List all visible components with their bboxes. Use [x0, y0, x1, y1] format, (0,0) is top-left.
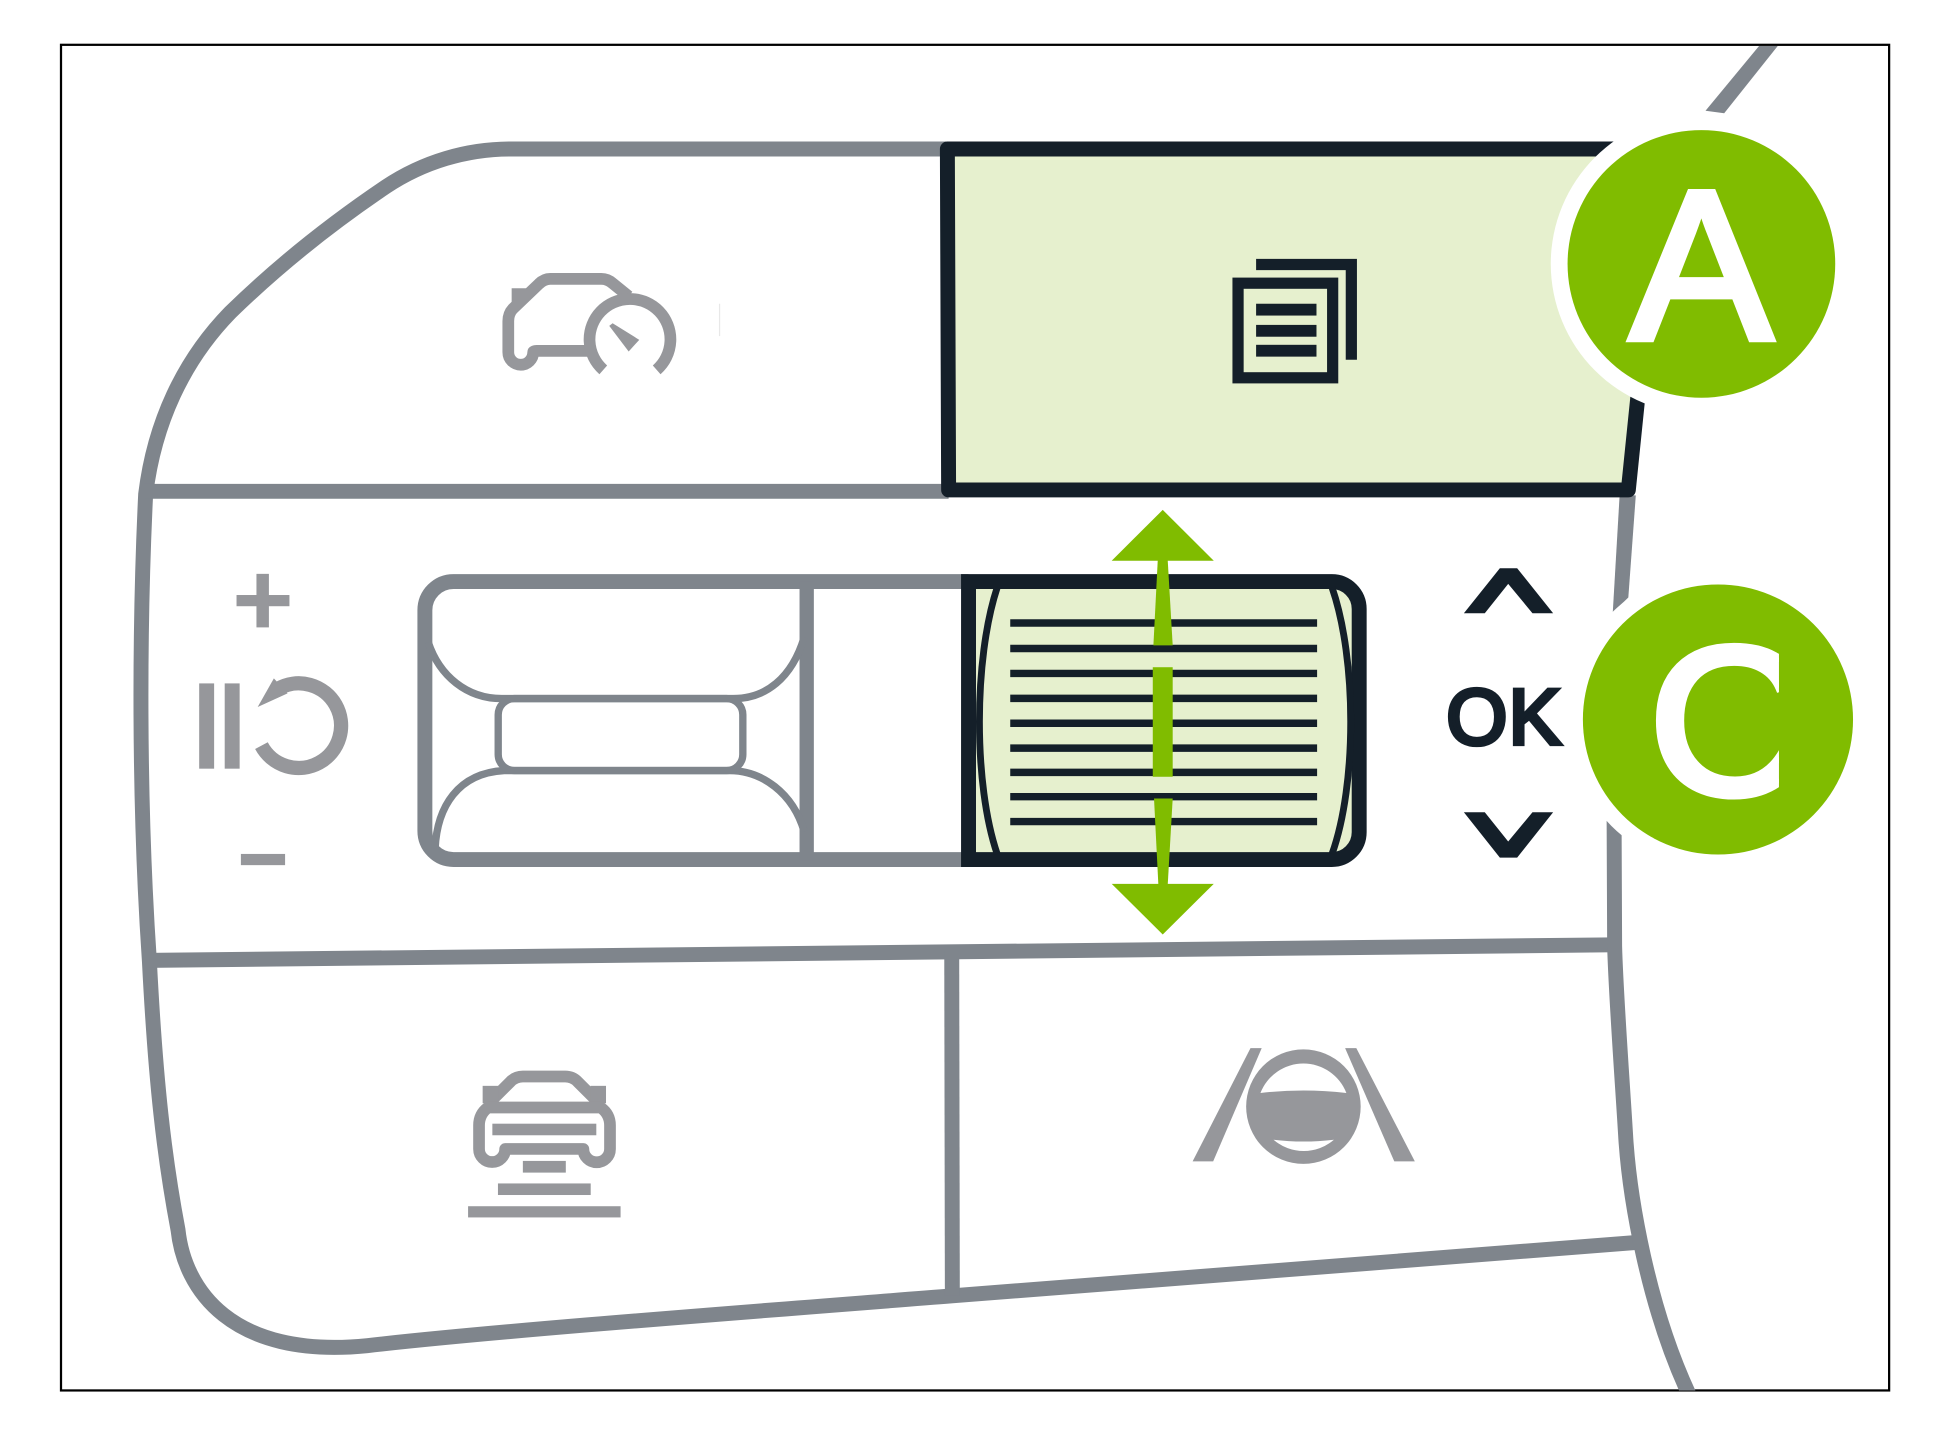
right rim segment — [1613, 495, 1636, 612]
callout: A: A — [1630, 147, 1772, 385]
icon: minus — [241, 854, 285, 865]
steering wheel spoke outline — [141, 149, 1692, 1400]
icon: chevron up — [1464, 568, 1553, 613]
icon: plus — [237, 574, 289, 627]
icon: chevron down — [1464, 812, 1553, 858]
icon: car front with lines — [468, 1077, 621, 1217]
callout: C — [1582, 584, 1854, 854]
icon: documents — [1238, 259, 1357, 378]
highlighted scroll wheel — [969, 582, 1359, 860]
callout: A — [1551, 113, 1852, 415]
OK label: OK — [1446, 673, 1561, 761]
arrow: scroll down — [1112, 799, 1214, 934]
icon: lane keeping steering wheel — [1193, 1048, 1415, 1164]
arrow: scroll up — [1112, 510, 1214, 645]
highlighted button A with document icon — [947, 149, 1663, 490]
upper right rim segment — [1706, 46, 1778, 113]
callout: C: C — [1648, 603, 1809, 839]
left rocker buttons — [425, 581, 969, 860]
icon: pause and return — [199, 678, 341, 769]
icon: car with speed gauge — [508, 279, 670, 370]
arrow: scroll centre segment — [1153, 667, 1173, 777]
